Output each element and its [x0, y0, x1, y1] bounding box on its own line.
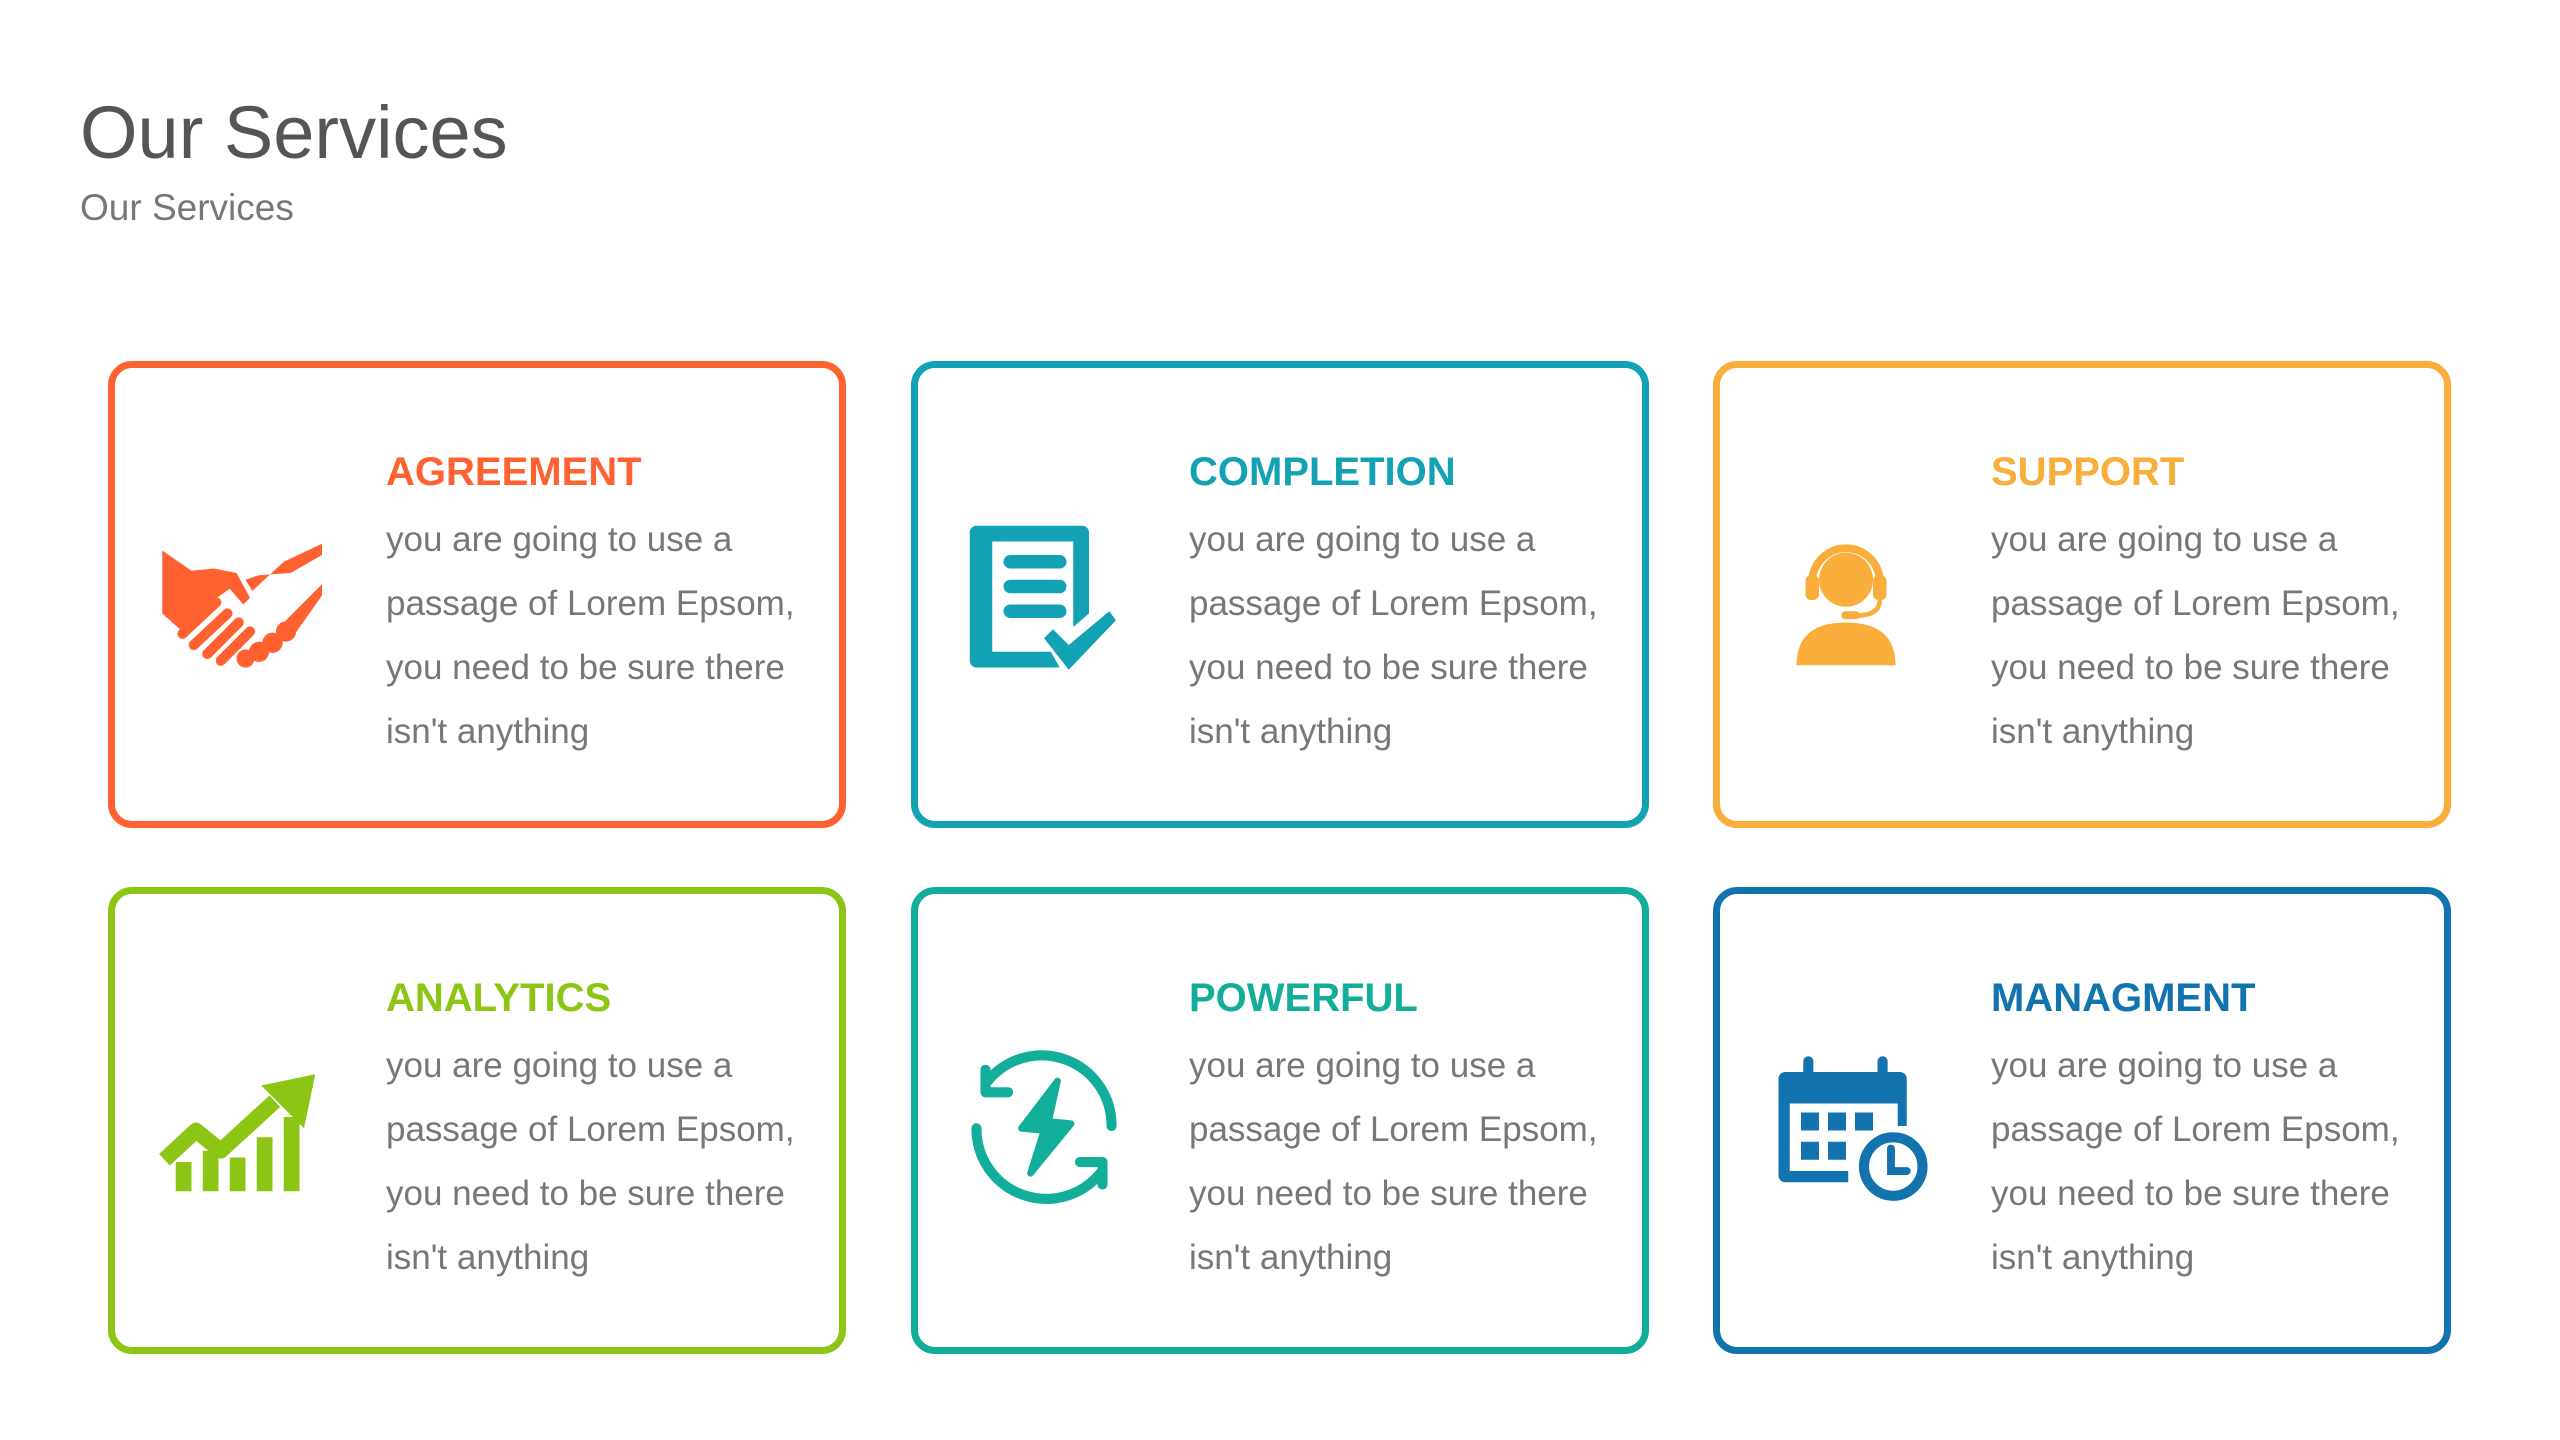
heading: SUPPORT: [1991, 450, 2184, 494]
text: [1991, 1046, 2400, 1277]
text: passage of Lorem Epsom,: [1991, 584, 2400, 623]
text: [1189, 520, 1598, 751]
panel: managment: [1713, 887, 2451, 1354]
icon: support agent: [1796, 544, 1896, 666]
icon: growth chart: [159, 1074, 316, 1192]
text: you need to be sure there: [386, 648, 785, 687]
heading: AGREEMENT: [386, 450, 642, 494]
icon: energy cycle: [971, 1050, 1117, 1204]
text: you need to be sure there: [1991, 648, 2390, 687]
icon: calendar clock: [1778, 1056, 1928, 1201]
icon: handshake: [162, 544, 322, 668]
text: isn't anything: [1991, 1238, 2194, 1277]
heading: POWERFUL: [1189, 976, 1418, 1020]
panel: completion: [911, 361, 1649, 828]
panel: analytics: [108, 887, 846, 1354]
text: you are going to use a: [1991, 1046, 2337, 1085]
text: isn't anything: [1189, 1238, 1392, 1277]
text: [1991, 520, 2400, 751]
text: you are going to use a: [1189, 1046, 1535, 1085]
text: you are going to use a: [386, 1046, 732, 1085]
text: passage of Lorem Epsom,: [386, 1110, 795, 1149]
heading: MANAGMENT: [1991, 976, 2255, 1020]
text: passage of Lorem Epsom,: [1189, 1110, 1598, 1149]
text: you are going to use a: [1991, 520, 2337, 559]
panel: powerful: [911, 887, 1649, 1354]
text: [1189, 1046, 1598, 1277]
text: isn't anything: [1189, 712, 1392, 751]
text: passage of Lorem Epsom,: [1991, 1110, 2400, 1149]
text: you need to be sure there: [386, 1174, 785, 1213]
heading: ANALYTICS: [386, 976, 611, 1020]
panel: support: [1713, 361, 2451, 828]
text: passage of Lorem Epsom,: [386, 584, 795, 623]
text: isn't anything: [386, 1238, 589, 1277]
text: you are going to use a: [386, 520, 732, 559]
text: you need to be sure there: [1189, 1174, 1588, 1213]
text: isn't anything: [1991, 712, 2194, 751]
text: passage of Lorem Epsom,: [1189, 584, 1598, 623]
icon: document check: [970, 526, 1116, 670]
text: isn't anything: [386, 712, 589, 751]
heading: COMPLETION: [1189, 450, 1456, 494]
text: you need to be sure there: [1991, 1174, 2390, 1213]
text: you are going to use a: [1189, 520, 1535, 559]
subtitle: Our Services: [80, 187, 294, 228]
title: Our Services: [80, 91, 508, 174]
panel: agreement: [108, 361, 846, 828]
text: you need to be sure there: [1189, 648, 1588, 687]
text: [386, 520, 795, 751]
text: [386, 1046, 795, 1277]
